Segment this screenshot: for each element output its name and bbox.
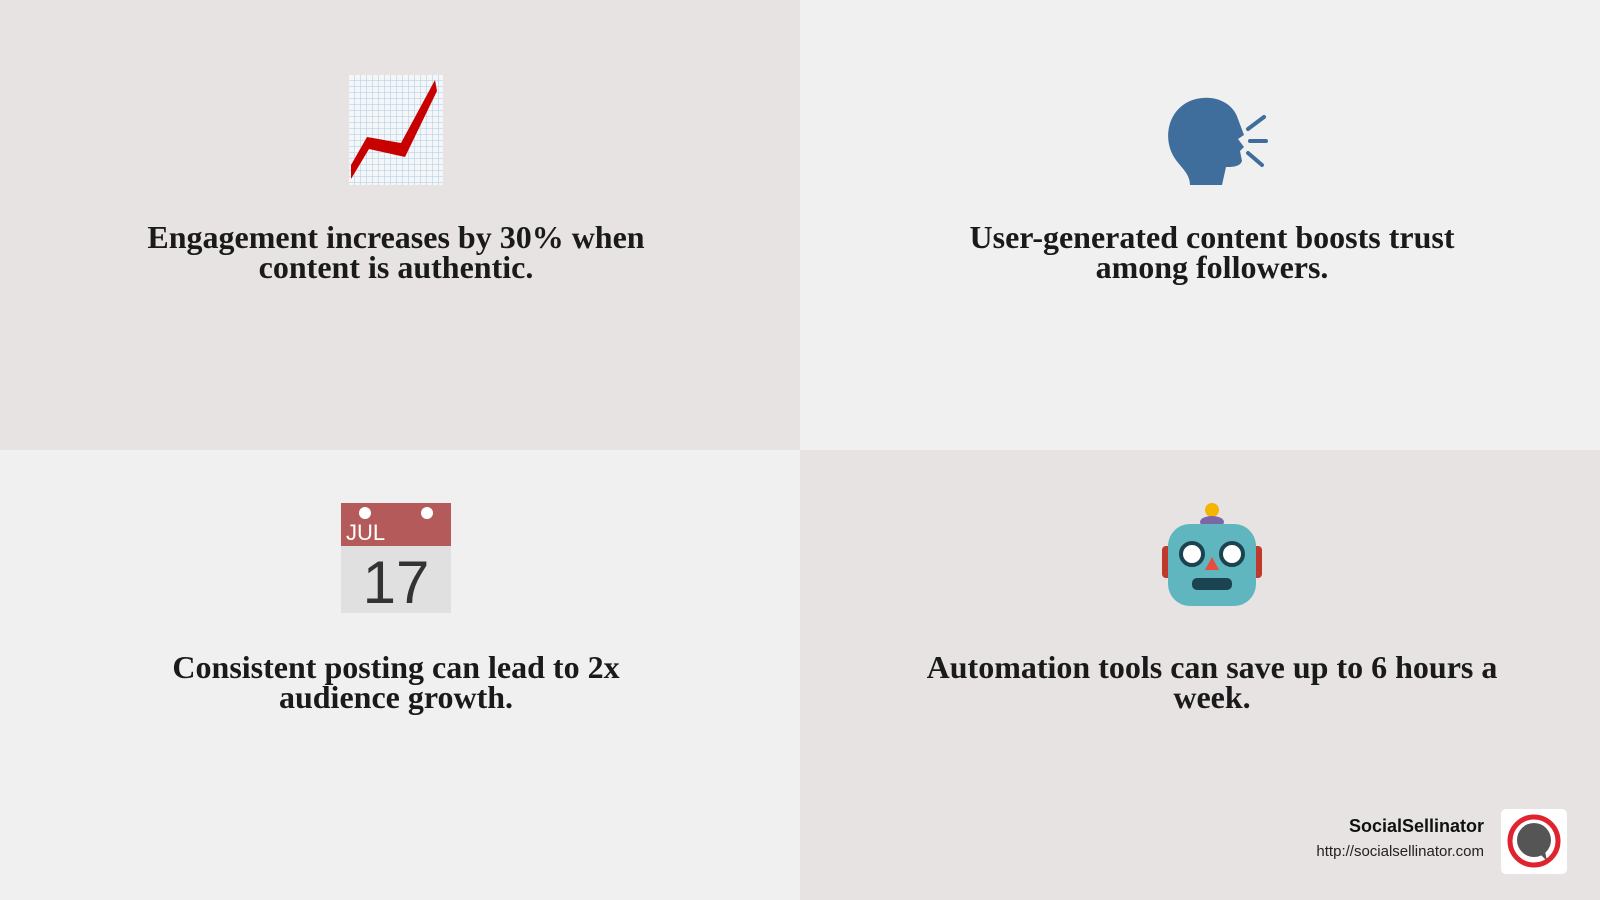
- heading: engagement: Engagement increases by 30% when: [147, 219, 645, 255]
- heading: ugc: among followers.: [1096, 249, 1328, 285]
- heading: ugc: User-generated content boosts trust: [970, 219, 1454, 255]
- heading: automation: week.: [1173, 679, 1251, 715]
- brand text: http://socialsellinator.com: [1316, 843, 1484, 860]
- heading: posting: Consistent posting can lead to 2x: [172, 649, 620, 685]
- heading: posting: audience growth.: [279, 679, 513, 715]
- panel: automation: [800, 450, 1600, 900]
- heading: ugc: [970, 219, 1454, 285]
- panel: consistent posting: [0, 450, 800, 900]
- heading: engagement: [147, 219, 645, 285]
- icon: calendar: [341, 503, 451, 613]
- panel: user-generated content: [800, 0, 1600, 450]
- icon: speaking head: [1168, 98, 1268, 185]
- icon: robot: [1162, 503, 1262, 606]
- logo: [1501, 809, 1567, 874]
- brand text: SocialSellinator: [1349, 816, 1484, 836]
- panel: engagement: [0, 0, 800, 450]
- icon: chart: [349, 75, 443, 185]
- icon: calendar: JUL: [346, 520, 385, 545]
- heading: posting: [172, 649, 620, 715]
- heading: automation: [926, 649, 1497, 715]
- heading: engagement: content is authentic.: [259, 249, 533, 285]
- heading: automation: Automation tools can save up to 6 hours a: [927, 649, 1497, 685]
- brand text: [1316, 816, 1484, 860]
